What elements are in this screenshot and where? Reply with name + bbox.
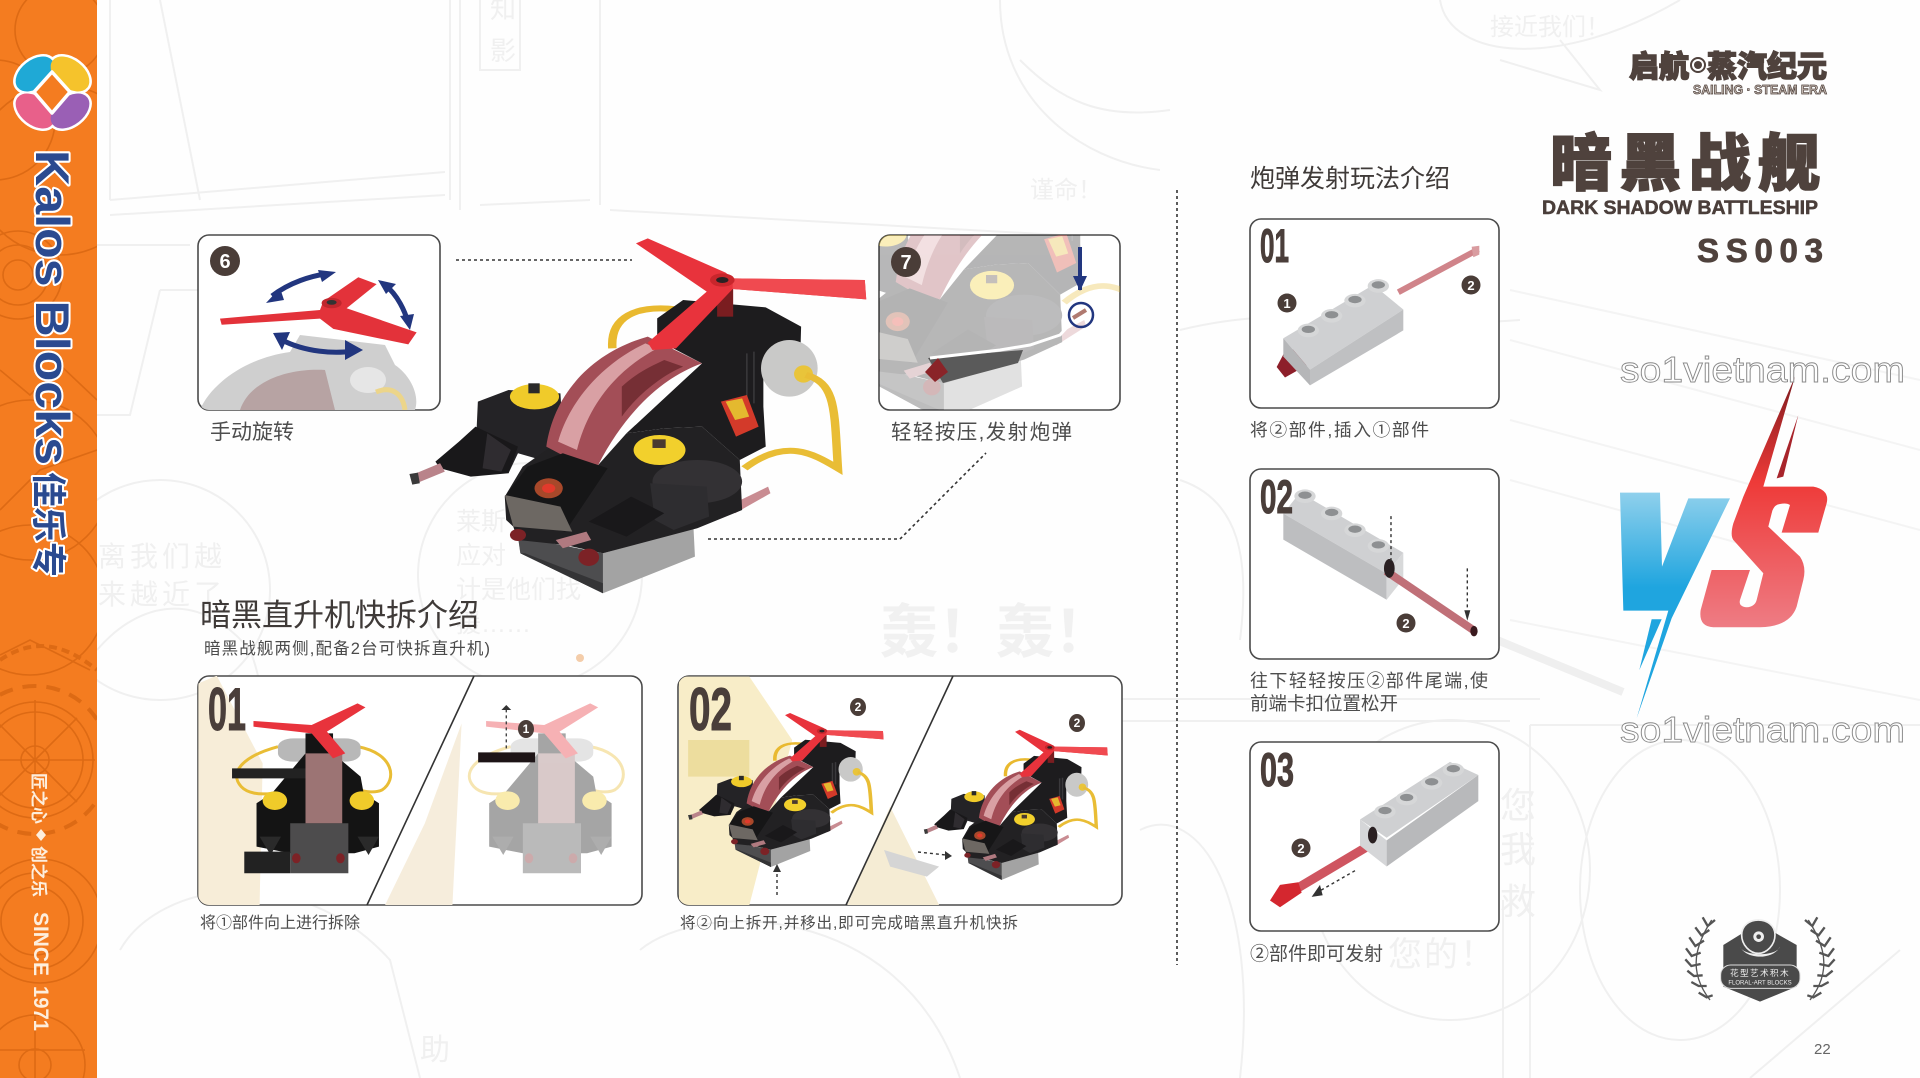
series logo: 蒸汽纪元 <box>1707 51 1827 84</box>
heading: shell firing: 炮弹发射玩法介绍 <box>1250 165 1450 193</box>
tagline: 1971 <box>29 986 52 1031</box>
sketch background: 谨命！ <box>1030 177 1102 204</box>
sketch background: 您的！ <box>1388 936 1496 974</box>
badge 7 <box>891 247 921 277</box>
sketch background: 应对 <box>456 542 506 570</box>
rotation arrows <box>266 270 414 360</box>
dashed leaders <box>456 190 1177 965</box>
sidebar: orange band <box>0 0 97 1078</box>
sketch background: 影 <box>490 36 516 66</box>
ghost helicopter zoomed <box>879 235 1120 410</box>
badge 2a <box>850 698 866 716</box>
sketch background: 离我们越 <box>98 541 226 572</box>
panel: step 6 rotor <box>198 235 440 410</box>
brick and rod <box>1283 489 1478 636</box>
caption line 2: 前端卡扣位置松开 <box>1250 693 1398 714</box>
tagline <box>29 773 52 1031</box>
series logo: 启航 <box>1629 51 1689 84</box>
badge 7: 7 <box>900 252 912 274</box>
number 03: 03 <box>1260 743 1294 796</box>
brick and rod <box>1277 246 1479 385</box>
badge 1: 1 <box>523 722 530 736</box>
number 01: 01 <box>1260 219 1289 272</box>
badge 2 <box>1292 838 1310 858</box>
watermark bottom: so1vietnam.com <box>1620 709 1905 750</box>
badge 1: 1 <box>1283 296 1291 311</box>
brick and rod <box>1270 762 1478 907</box>
badge 2 <box>1462 276 1480 294</box>
subheading: 暗黑战舰两侧,配备2台可快拆直升机) <box>204 639 490 658</box>
sketch background: 助 <box>420 1034 450 1067</box>
badge 2b <box>1069 714 1085 732</box>
rotor <box>220 277 417 344</box>
caption: 往下轻轻按压②部件尾端,使 <box>1250 671 1488 691</box>
series logo: SAILING · STEAM ERA <box>1693 83 1827 97</box>
panel: quick release 02 <box>678 676 1122 905</box>
faded comic strip <box>679 677 939 905</box>
badge 6: 6 <box>219 251 231 273</box>
highlight circle <box>1069 303 1093 327</box>
tagline: SINCE <box>29 912 52 976</box>
caption: ②部件即可发射 <box>1250 943 1383 965</box>
sketch background: 我 <box>1500 829 1536 870</box>
number 01: 01 <box>208 676 246 743</box>
badge 1 <box>518 720 534 738</box>
panel: firing 01 <box>1250 219 1499 408</box>
title: dark shadow battleship: 暗黑战舰 <box>1550 130 1820 199</box>
watermark top: so1vietnam.com <box>1620 349 1905 390</box>
badge 2: 2 <box>1402 616 1410 631</box>
VS emblem <box>1620 377 1827 718</box>
badge 2: 2 <box>1467 278 1475 293</box>
caption: lift part 2: 将②向上拆开,并移出,即可完成暗黑直升机快拆 <box>680 914 1018 932</box>
badge 2 <box>1396 614 1416 632</box>
floral-art blocks emblem <box>1685 917 1835 1002</box>
main helicopter <box>409 238 866 593</box>
press arrow <box>1078 247 1082 290</box>
caption: manual rotation: 手动旋转 <box>210 421 294 444</box>
sketch background: 援…… <box>456 610 531 638</box>
sketch background: 计是他们找 <box>456 576 581 604</box>
brand name <box>26 150 79 577</box>
sketch background: 您 <box>1500 785 1536 826</box>
brand name: Kalos Blocks <box>26 150 79 465</box>
badge 2a: 2 <box>855 700 862 714</box>
panel: firing 02 <box>1250 469 1499 659</box>
badge 2: 2 <box>1297 841 1305 856</box>
page number: 22 <box>1814 1041 1831 1058</box>
caption: press to fire: 轻轻按压,发射炮弹 <box>891 421 1072 444</box>
sketch background: 来越近了 <box>98 579 226 610</box>
faded comic strip <box>198 676 623 905</box>
badge 6 <box>210 246 240 276</box>
panel: firing 03 <box>1250 742 1499 931</box>
panel: step 7 fire <box>878 234 1121 411</box>
floral-art blocks emblem: FLORAL-ART BLOCKS <box>1728 980 1792 987</box>
gear pattern <box>0 0 97 1078</box>
sketch background: 接近我们！ <box>1490 14 1610 41</box>
caption: remove part 1: 将①部件向上进行拆除 <box>200 914 360 932</box>
panel: quick release 01 <box>198 676 642 905</box>
model number: SS003 <box>1697 232 1823 269</box>
caption: 将②部件,插入①部件 <box>1250 420 1429 440</box>
number 02: 02 <box>1260 470 1293 523</box>
sketch background: 莱斯 <box>456 508 506 536</box>
sketch background: 救 <box>1500 881 1536 922</box>
tagline: 创之乐 <box>29 846 49 897</box>
brand name: 佳乐专 <box>28 472 67 577</box>
ghost helicopter <box>200 335 416 410</box>
subtitle: DARK SHADOW BATTLESHIP <box>1542 197 1818 219</box>
sketch background: 轰！轰！ <box>880 600 1112 665</box>
logo: four-colour quatrefoil <box>9 49 96 136</box>
number 02: 02 <box>689 676 732 743</box>
heading: helicopter quick release: 暗黑直升机快拆介绍 <box>200 598 479 633</box>
badge 2b: 2 <box>1074 716 1081 730</box>
series logo <box>1629 51 1827 97</box>
tagline: 匠之心 <box>29 773 49 824</box>
badge 1 <box>1278 294 1296 312</box>
floral-art blocks emblem: 花型艺术积木 <box>1730 967 1790 978</box>
